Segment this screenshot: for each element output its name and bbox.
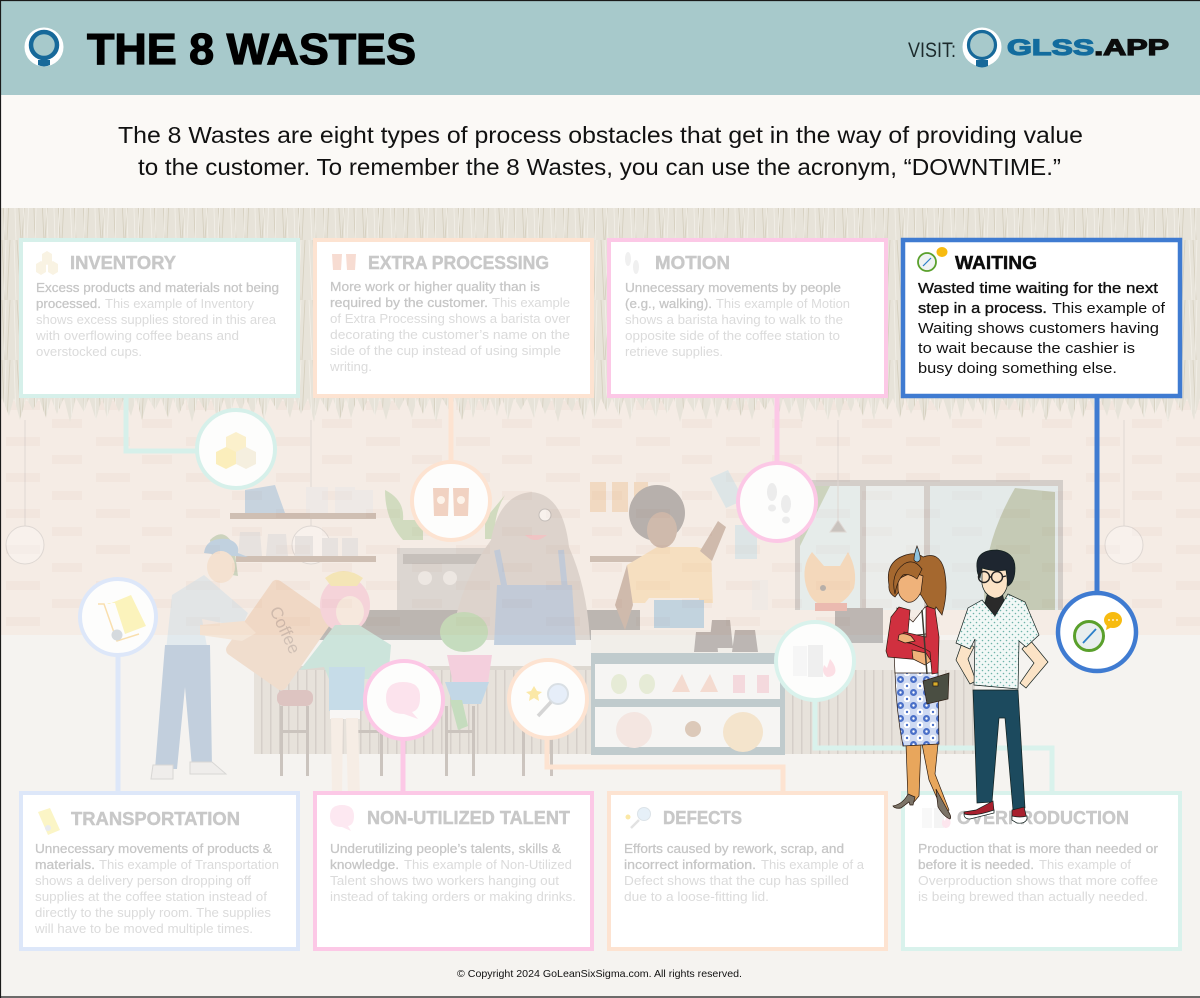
body text: processed. bbox=[36, 296, 101, 311]
body text: writing. bbox=[329, 359, 372, 374]
icon: defects magnifier bbox=[626, 808, 650, 828]
icon: talent brain bbox=[330, 805, 354, 831]
icon: brain bbox=[386, 682, 420, 719]
icon circle: overproduction bbox=[776, 622, 854, 700]
arms bbox=[956, 640, 1048, 688]
body text: This example of Motion bbox=[716, 296, 850, 311]
icon: inventory boxes bbox=[36, 251, 58, 275]
character: waiting man bbox=[956, 550, 1048, 823]
background: brick wall bbox=[0, 395, 1200, 635]
body text: will have to be moved multiple times. bbox=[34, 921, 253, 936]
icon: clock and speech bubble bbox=[1074, 612, 1122, 650]
icon: GLSS lightbulb logo bbox=[24, 28, 64, 66]
shelves with kitchenware bbox=[210, 470, 757, 576]
body text: Wasted time waiting for the next bbox=[918, 280, 1159, 297]
body text bbox=[625, 280, 850, 359]
heading: INVENTORY bbox=[70, 252, 177, 273]
icon circle: inventory bbox=[197, 410, 275, 488]
body text: step in a process. bbox=[918, 300, 1047, 317]
body text: More work or higher quality than is bbox=[330, 279, 540, 294]
body text bbox=[329, 279, 571, 374]
heading: EXTRA PROCESSING bbox=[368, 252, 549, 273]
window bbox=[795, 480, 1063, 610]
body text: shows a delivery person dropping off bbox=[35, 873, 251, 888]
body text: of Extra Processing shows a barista over bbox=[330, 311, 571, 326]
front hair bbox=[894, 562, 922, 594]
ponytail hair bbox=[888, 554, 946, 615]
body text: instead of taking orders or making drinks. bbox=[330, 889, 576, 904]
head bbox=[982, 565, 1008, 598]
icon circle: motion bbox=[738, 463, 816, 541]
icon: overproduction bbox=[922, 808, 951, 828]
body text: Waiting shows customers having bbox=[918, 320, 1159, 337]
icon: hand truck bbox=[98, 595, 146, 641]
trousers bbox=[973, 690, 1025, 810]
handbag bbox=[922, 610, 949, 704]
legs bbox=[906, 744, 949, 814]
heading: MOTION bbox=[655, 252, 730, 273]
icon: transportation bbox=[38, 808, 60, 835]
icon: magnifier with spark bbox=[526, 684, 568, 716]
red cardigan and crossed arms bbox=[886, 606, 939, 674]
sneakers bbox=[964, 801, 1027, 823]
glasses bbox=[978, 572, 1006, 582]
body text bbox=[624, 841, 865, 904]
body text: Unnecessary movements by people bbox=[625, 280, 841, 295]
stools bbox=[277, 690, 553, 776]
body text: is being brewed than actually needed. bbox=[918, 889, 1148, 904]
connector: extra processing bbox=[448, 398, 454, 464]
icon: waiting clock bbox=[918, 247, 948, 271]
body text: Efforts caused by rework, scrap, and bbox=[624, 841, 844, 856]
icon: footprints bbox=[767, 483, 791, 524]
espresso machine bbox=[397, 548, 489, 610]
card: defects bbox=[609, 793, 886, 949]
connector: overproduction bbox=[815, 699, 1052, 793]
body text: due to a loose-fitting lid. bbox=[624, 889, 769, 904]
body text bbox=[918, 841, 1159, 904]
body text bbox=[918, 280, 1166, 377]
heading: OVERPRODUCTION bbox=[957, 807, 1129, 828]
body text: incorrect information. bbox=[624, 857, 756, 872]
visit label: VISIT: bbox=[908, 39, 956, 62]
title: THE 8 WASTES bbox=[87, 26, 416, 74]
bar counter bbox=[254, 608, 975, 754]
body text: supplies at the coffee station instead of bbox=[35, 889, 267, 904]
icon: motion footprints bbox=[625, 252, 639, 274]
body text: opposite side of the coffee station to bbox=[625, 328, 840, 343]
icon: cups bbox=[433, 488, 469, 516]
card: waiting (active) bbox=[903, 240, 1180, 396]
body text bbox=[330, 841, 576, 904]
body text: directly to the supply room. The supplies bbox=[35, 905, 271, 920]
body text: Unnecessary movements of products & bbox=[35, 841, 272, 856]
figure: frog worker bbox=[440, 612, 492, 730]
figure: barista with afro bbox=[615, 485, 726, 630]
body text: before it is needed. bbox=[918, 857, 1034, 872]
shoes bbox=[893, 789, 951, 819]
connector: non-utilized talent bbox=[400, 738, 406, 793]
website name: GLSS .APP bbox=[1007, 35, 1169, 60]
card: inventory bbox=[21, 240, 298, 396]
body text: retrieve supplies. bbox=[625, 344, 723, 359]
character: waiting woman bbox=[886, 546, 951, 819]
body text: This example of bbox=[1052, 300, 1166, 317]
figure: manatee barista bbox=[451, 492, 590, 645]
body text: side of the cup instead of using simple bbox=[330, 343, 561, 358]
body text: busy doing something else. bbox=[918, 360, 1117, 377]
body text: overstocked cups. bbox=[36, 344, 142, 359]
body text: Production that is more than needed or bbox=[918, 841, 1159, 856]
heading: NON-UTILIZED TALENT bbox=[367, 807, 571, 828]
card: extra processing bbox=[315, 240, 592, 396]
body text: This example of Transportation bbox=[99, 857, 279, 872]
white blouse bbox=[894, 607, 934, 673]
dotted shirt bbox=[956, 594, 1039, 689]
figure: fox bbox=[804, 552, 855, 611]
card: non-utilized talent bbox=[315, 793, 592, 949]
card: overproduction bbox=[903, 793, 1180, 949]
body text: with overflowing coffee beans and bbox=[35, 328, 239, 343]
icon: extra processing cups bbox=[332, 254, 356, 270]
icon circle: non-utilized talent bbox=[365, 661, 443, 739]
neck and tee bbox=[984, 592, 1005, 620]
heading: TRANSPORTATION bbox=[71, 808, 240, 829]
connector: waiting bbox=[1094, 398, 1100, 594]
sweat drop bbox=[914, 546, 920, 562]
figure: pink-haired worker bbox=[300, 571, 391, 800]
body text: This example of Inventory bbox=[105, 296, 255, 311]
card: motion bbox=[609, 240, 886, 396]
heading: DEFECTS bbox=[663, 807, 742, 828]
body text: (e.g., walking). bbox=[625, 296, 712, 311]
figure: delivery person with sack: Coffee bbox=[266, 604, 304, 657]
body text: This example of a bbox=[761, 857, 865, 872]
body text: knowledge. bbox=[330, 857, 399, 872]
icon: boxes bbox=[216, 432, 256, 469]
connector: inventory bbox=[126, 398, 198, 451]
icon circle: waiting bbox=[1058, 593, 1136, 671]
face bbox=[898, 574, 923, 602]
hair bbox=[977, 550, 1015, 586]
body text: This example of bbox=[1039, 857, 1131, 872]
body text: decorating the customer’s name on the bbox=[330, 327, 570, 342]
connector: transportation bbox=[116, 655, 120, 793]
body text: This example of Non-Utilized bbox=[404, 857, 572, 872]
body text: shows a barista having to walk to the bbox=[625, 312, 843, 327]
crossed hands bbox=[898, 634, 931, 665]
icon circle: transportation bbox=[80, 579, 156, 655]
card: transportation bbox=[21, 793, 298, 949]
pendant lamps bbox=[6, 420, 1143, 564]
body text: required by the customer. bbox=[330, 295, 488, 310]
body text: Underutilizing people’s talents, skills & bbox=[330, 841, 561, 856]
coffee carafes bbox=[694, 580, 768, 652]
body text: Defect shows that the cup has spilled bbox=[624, 873, 849, 888]
intro panel bbox=[0, 95, 1200, 208]
illustration: faded coffee shop scene bbox=[6, 420, 1143, 800]
heading: WAITING bbox=[955, 252, 1037, 273]
icon circle: defects bbox=[509, 660, 587, 738]
body text bbox=[35, 280, 279, 359]
connector: defects bbox=[547, 738, 783, 793]
body text: materials. bbox=[35, 857, 95, 872]
intro text line 1: The 8 Wastes are eight types of process obstacles that get in the way of providing value bbox=[118, 122, 1083, 148]
icon: visit logo bulb bbox=[962, 28, 1002, 68]
body text: shows excess supplies stored in this area bbox=[36, 312, 277, 327]
figure: delivery person with sack bbox=[151, 539, 334, 779]
header band bbox=[0, 0, 1200, 95]
body text: This example bbox=[492, 295, 570, 310]
connector: motion bbox=[774, 398, 780, 464]
intro text line 2: to the customer. To remember the 8 Wastes, you can use the acronym, “DOWNTIME.” bbox=[138, 154, 1061, 180]
body text bbox=[34, 841, 279, 936]
floral skirt bbox=[895, 672, 939, 746]
body text: Overproduction shows that more coffee bbox=[918, 873, 1158, 888]
pastry display case bbox=[591, 630, 785, 755]
body text: to wait because the cashier is bbox=[918, 340, 1135, 357]
body text: Excess products and materials not being bbox=[36, 280, 279, 295]
icon circle: extra processing bbox=[412, 462, 490, 540]
icon: stack and flame bbox=[793, 645, 835, 677]
copyright: © Copyright 2024 GoLeanSixSigma.com. All rights reserved. bbox=[457, 968, 742, 980]
body text: Talent shows two workers hanging out bbox=[330, 873, 559, 888]
background: thatched roof bbox=[0, 208, 1200, 422]
